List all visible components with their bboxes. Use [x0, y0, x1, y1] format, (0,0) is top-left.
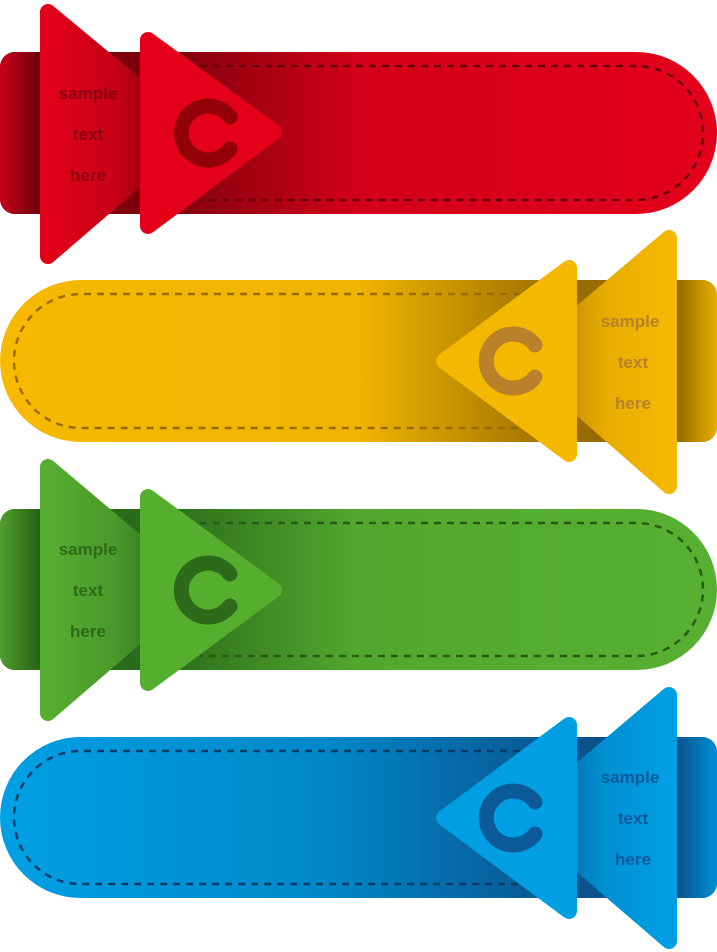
yellow back triangle with text: sample [601, 312, 659, 331]
red back triangle with text: here [70, 166, 106, 185]
red back triangle with text: sample [59, 84, 117, 103]
blue back triangle with text: here [615, 850, 651, 869]
yellow front triangle with C icon [444, 268, 569, 454]
red back triangle with text: text [73, 125, 103, 144]
green back triangle with text: sample [59, 540, 117, 559]
panel: yellow band [0, 238, 717, 486]
blue back triangle with text: text [618, 809, 648, 828]
yellow back triangle with text: here [615, 394, 651, 413]
green back triangle with text: text [73, 581, 103, 600]
panel: blue band [0, 695, 717, 941]
blue front triangle with C icon [444, 725, 569, 911]
yellow back triangle with text: text [618, 353, 648, 372]
green back triangle with text: here [70, 622, 106, 641]
panel: green band [0, 467, 717, 713]
green front triangle with C icon [148, 497, 274, 683]
red back triangle with text [48, 12, 178, 256]
green back triangle with text [48, 467, 178, 713]
red pill [0, 52, 717, 214]
blue back triangle with text: sample [601, 768, 659, 787]
panel: red band [0, 12, 717, 256]
red front triangle with C icon [148, 40, 274, 226]
blue back triangle with text [539, 695, 669, 941]
yellow back triangle with text [539, 238, 669, 486]
